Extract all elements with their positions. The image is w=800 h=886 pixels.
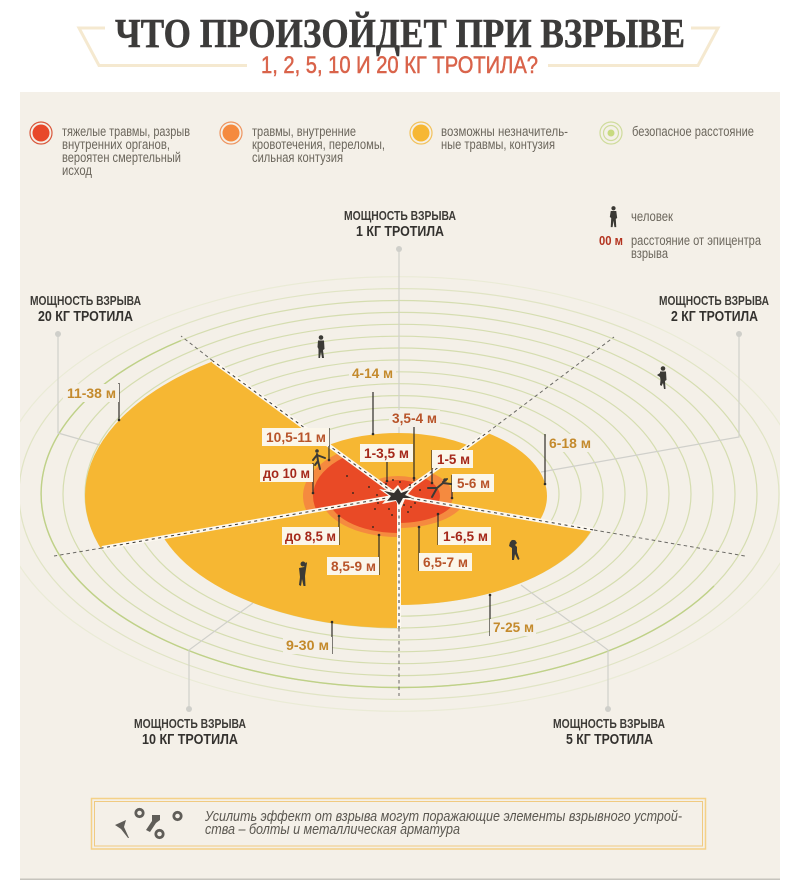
distance marker ticks: [118, 383, 546, 654]
icon: person thrown 20 kg: [313, 449, 325, 469]
icon: bolts and nuts: [115, 809, 181, 838]
callout box: [92, 798, 706, 849]
heading: 2 kg: МОЩНОСТЬ ВЗРЫВА: [659, 293, 769, 308]
legend item: minor: ные травмы, контузия: [441, 137, 555, 152]
title block: [79, 10, 718, 79]
callout text: ства – болты и металлическая арматура: [205, 821, 460, 838]
heading: 5 kg: 5 КГ ТРОТИЛА: [566, 732, 653, 748]
legend item: severe: исход: [62, 163, 92, 178]
heading: 20 kg: 20 КГ ТРОТИЛА: [38, 309, 133, 325]
label 8,5-9 м: 8,5-9 м: [331, 558, 376, 574]
label 1-6,5 м: 1-6,5 м: [443, 528, 488, 544]
title frame left: [79, 28, 247, 66]
legend: severity zones: [30, 122, 754, 178]
label 3,5-4 м: 3,5-4 м: [392, 410, 437, 426]
icon: person 1 kg: [318, 335, 324, 358]
legend item: moderate: кровотечения, переломы,: [252, 137, 385, 152]
legend item: moderate: [220, 122, 385, 165]
legend: symbols: расстояние от эпицентра: [631, 233, 761, 248]
legend: symbols: 00 м: [599, 233, 623, 248]
concentric safe-distance rings: [0, 277, 800, 711]
legend item: moderate: травмы, внутренние: [252, 124, 356, 139]
subheading: 1, 2, 5, 10 И 20 КГ ТРОТИЛА?: [261, 52, 538, 79]
heading: 2 kg: 2 КГ ТРОТИЛА: [671, 309, 758, 325]
sector: 10 kg: [164, 500, 397, 628]
icon: person lying 2 kg: [428, 478, 451, 497]
heading: 20 kg: МОЩНОСТЬ ВЗРЫВА: [30, 293, 141, 308]
legend item: minor: [410, 122, 568, 152]
heading: 1 kg: МОЩНОСТЬ ВЗРЫВА: [344, 208, 456, 223]
heading: 1 kg: 1 КГ ТРОТИЛА: [356, 224, 444, 240]
label 10,5-11 м: 10,5-11 м: [266, 429, 326, 445]
heading: 20 kg: [30, 293, 141, 325]
heading: 2 kg: [659, 293, 769, 325]
label 7-25 м: 7-25 м: [493, 619, 534, 635]
heading: 5 kg: [553, 716, 665, 748]
legend item: severe: [30, 122, 190, 178]
callout text: [204, 808, 682, 838]
label 6,5-7 м: 6,5-7 м: [423, 554, 468, 570]
heading: 10 kg: [134, 716, 246, 748]
icon: person 5 kg: [509, 540, 520, 560]
label 4-14 м: 4-14 м: [352, 365, 393, 381]
legend item: severe: внутренних органов,: [62, 137, 170, 152]
legend: symbols: человек: [631, 209, 673, 224]
label 5-6 м: 5-6 м: [457, 475, 490, 491]
legend item: safe: безопасное расстояние: [632, 124, 754, 139]
heading: 5 kg: МОЩНОСТЬ ВЗРЫВА: [553, 716, 665, 731]
sector: 1 kg: [330, 433, 467, 491]
label до 8,5 м: до 8,5 м: [285, 528, 336, 544]
callout text: Усилить эффект от взрыва могут поражающие элементы взрывного устрой-: [204, 808, 682, 825]
sector: 5 kg: [401, 499, 591, 605]
label до 10 м: до 10 м: [263, 465, 310, 481]
main heading: ЧТО ПРОИЗОЙДЕТ ПРИ ВЗРЫВЕ: [115, 10, 685, 56]
icon: person 2 kg: [657, 366, 666, 389]
debris particles: [346, 475, 421, 528]
legend item: moderate: сильная контузия: [252, 150, 343, 165]
label 1-5 м: 1-5 м: [437, 451, 470, 467]
legend: symbols: взрыва: [631, 246, 668, 261]
label 11-38 м: 11-38 м: [67, 385, 116, 401]
heading: 1 kg: [344, 208, 456, 240]
legend: symbols: [599, 206, 761, 261]
icon: person 10 kg: [299, 562, 307, 586]
icon: explosion star: [379, 485, 418, 511]
sector divider rays: [54, 336, 745, 696]
heading: 10 kg: МОЩНОСТЬ ВЗРЫВА: [134, 716, 246, 731]
label 9-30 м: 9-30 м: [286, 637, 329, 653]
label 1-3,5 м: 1-3,5 м: [364, 445, 409, 461]
sector: 20 kg: [85, 361, 389, 548]
icon: person legend: [610, 206, 617, 227]
legend item: safe: [600, 122, 754, 144]
sector: 2 kg: [408, 432, 547, 519]
legend item: severe: тяжелые травмы, разрыв: [62, 124, 190, 139]
distance labels: [63, 364, 594, 654]
grey leader lines: [55, 246, 742, 712]
legend item: severe: вероятен смертельный: [62, 150, 181, 165]
legend item: minor: возможны незначитель-: [441, 124, 568, 139]
persons: [299, 335, 666, 586]
heading: 10 kg: 10 КГ ТРОТИЛА: [142, 732, 238, 748]
label 6-18 м: 6-18 м: [549, 435, 591, 451]
title frame right: [548, 28, 718, 66]
